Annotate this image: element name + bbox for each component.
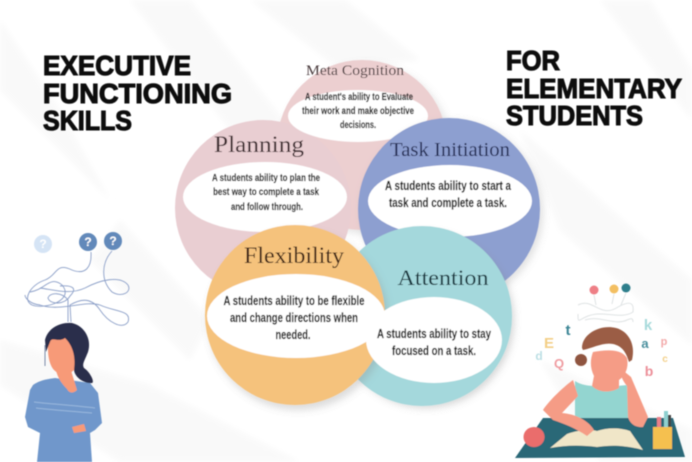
attention description: focused on a task. bbox=[392, 344, 476, 358]
illustration: reading girl bbox=[515, 284, 685, 458]
attention description bbox=[366, 297, 502, 383]
venn diagram bbox=[175, 60, 543, 410]
panel: planning text: and follow through. bbox=[231, 202, 303, 213]
floating letters: E bbox=[544, 335, 554, 352]
floating letters: a bbox=[641, 336, 649, 351]
panel: planning text: Planning bbox=[214, 132, 305, 157]
floating letters: b bbox=[645, 363, 653, 379]
icon: question bubbles: ? bbox=[109, 234, 117, 248]
panel: flexibility: Flexibility bbox=[244, 243, 345, 268]
desk bbox=[515, 418, 685, 458]
floating letters: c bbox=[662, 354, 668, 365]
title: executive functioning skills: SKILLS bbox=[43, 105, 132, 136]
panel: planning text bbox=[183, 132, 347, 232]
icon: question bubbles: ? bbox=[84, 235, 92, 249]
title: for elementary students: STUDENTS bbox=[506, 100, 643, 131]
tangled lines bbox=[25, 251, 129, 325]
panel: task initiation: A students ability to start a bbox=[385, 178, 512, 193]
title: executive functioning skills: FUNCTIONING bbox=[43, 78, 232, 109]
floating letters bbox=[535, 317, 668, 379]
icon: balloons bbox=[590, 284, 630, 294]
panel: planning text: A students ability to plan the bbox=[212, 173, 320, 184]
icon: question bubbles bbox=[34, 232, 122, 253]
hair bbox=[45, 323, 93, 383]
title: for elementary students: ELEMENTARY bbox=[506, 73, 682, 104]
panel: planning text: best way to complete a task bbox=[213, 187, 319, 198]
illustration: thinking woman bbox=[25, 232, 129, 462]
attention description: A students ability to stay bbox=[377, 327, 491, 341]
neck and face bbox=[591, 350, 628, 392]
dress bbox=[575, 381, 629, 420]
apple bbox=[524, 427, 544, 447]
title: executive functioning skills bbox=[43, 50, 232, 136]
floating letters: p bbox=[661, 336, 668, 348]
panel: flexibility bbox=[205, 225, 388, 410]
panel: attention: Attention bbox=[398, 265, 488, 290]
floating letters: t bbox=[566, 322, 570, 339]
pencil cup bbox=[653, 411, 672, 449]
floating letters: Q bbox=[554, 356, 564, 371]
title: for elementary students bbox=[506, 45, 682, 131]
panel: flexibility: and change directions when bbox=[230, 310, 358, 325]
floating letters: d bbox=[535, 349, 543, 363]
panel: task initiation: task and complete a task. bbox=[389, 195, 507, 210]
panel: meta-cognition text: their work and make objective bbox=[302, 106, 414, 117]
panel: meta-cognition text: Meta Cognition bbox=[306, 63, 405, 79]
panel: attention bbox=[332, 226, 514, 408]
circle: planning bbox=[175, 120, 351, 296]
panel: meta-cognition text: decisions. bbox=[340, 120, 376, 131]
floating letters: k bbox=[644, 317, 653, 334]
arm highlight bbox=[34, 402, 95, 413]
title: for elementary students: FOR bbox=[506, 45, 560, 76]
panel: flexibility: A students ability to be flexible bbox=[224, 293, 364, 308]
panel: task initiation: Task Initiation bbox=[390, 139, 510, 161]
hair bbox=[582, 327, 633, 362]
panel: meta-cognition text: A student's ability to Evaluate bbox=[305, 92, 413, 103]
panel: task initiation bbox=[358, 118, 543, 303]
panel: flexibility: needed. bbox=[276, 327, 310, 342]
hands and face bbox=[72, 424, 86, 433]
woman body bbox=[25, 378, 102, 462]
book bbox=[550, 428, 643, 450]
icon: question bubbles: ? bbox=[39, 237, 47, 251]
panel: meta-cognition text bbox=[288, 63, 428, 142]
title: executive functioning skills: EXECUTIVE bbox=[43, 50, 191, 81]
circle: meta-cognition bbox=[277, 60, 451, 234]
arms bbox=[543, 380, 594, 436]
